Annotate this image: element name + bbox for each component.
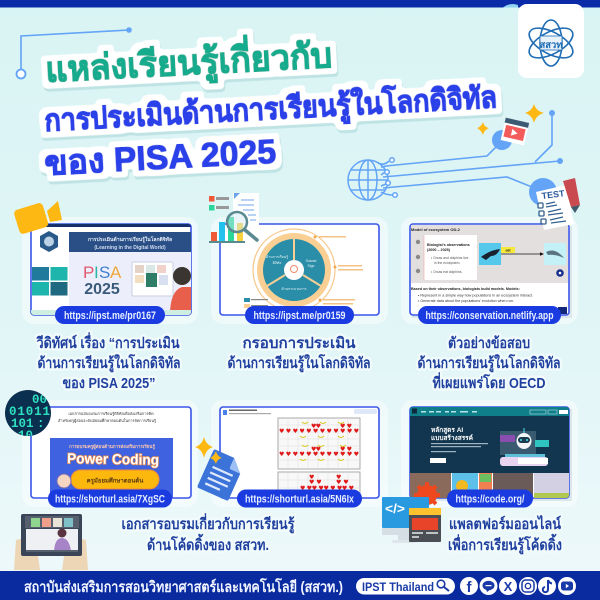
caption 6: เพื่อการเรียนรู้โค้ดดิ้ง	[448, 533, 562, 555]
Power Coding banner	[50, 438, 173, 498]
caption 2: กรอบการประเมิน	[242, 334, 356, 352]
heart grid 2: ♥ ♥♥ ♥♥ ♥ ♥♥ ♥	[300, 485, 354, 492]
icon: code monitor and window	[382, 482, 441, 543]
card 3: sample test: Model of ecosystem OD-2	[411, 227, 461, 232]
social icons	[460, 577, 576, 596]
observations panel: (2000 – 2025)	[427, 248, 451, 252]
explanation text	[411, 287, 533, 303]
url pill 5	[237, 490, 362, 508]
caption 1: ของ PISA 2025”	[62, 375, 156, 392]
icon: test sheet: TEST	[541, 188, 566, 201]
heart grid 2: ♥ ♥	[336, 479, 349, 486]
title line 1: แหล่งเรียนรู้เกี่ยวกับ	[44, 30, 333, 92]
caption 2: ด้านการเรียนรู้ในโลกดิจิทัล	[228, 353, 370, 373]
icon: facebook: f	[466, 579, 472, 596]
icon: binary code circle: :	[37, 417, 45, 431]
icon: x: X	[504, 579, 513, 594]
card 4: training document: ครูมัธยมศึกษาตอนต้น	[87, 476, 144, 486]
url pill 1	[55, 306, 165, 324]
top bar	[0, 0, 600, 8]
caption 1	[36, 332, 180, 392]
icon: binary code circle: 00	[32, 393, 47, 407]
caption 1: ด้านการเรียนรู้ในโลกดิจิทัล	[38, 353, 180, 373]
url pill 4: https://shorturl.asia/7XgSC	[55, 494, 165, 506]
caption 3: ด้านการเรียนรู้ในโลกดิจิทัล	[418, 353, 560, 373]
illustration: video call	[132, 262, 192, 315]
explanation text: Based on their observations, biologists build models. Models:	[411, 287, 520, 291]
robot illustration	[500, 428, 549, 466]
heart grid 1: ♥♥	[311, 446, 321, 453]
card 4: training document	[22, 400, 198, 508]
heart grid 1: ♥♥	[340, 423, 352, 430]
icon: video window	[501, 118, 529, 145]
url pill 6: https://code.org/	[456, 494, 524, 506]
PISA 2025 wordmark: P	[83, 263, 94, 282]
card 2: framework	[211, 217, 388, 324]
observations panel	[416, 235, 477, 280]
title	[43, 30, 498, 183]
icon: sparkle doc large	[195, 437, 213, 458]
icon: google doc	[197, 449, 245, 501]
card 4: training document: เอกสารฉบับอบรมการเรียนรู้ดิจิทัลเพื่อส่งเสริมการคิด	[68, 411, 154, 416]
search pill	[356, 578, 455, 594]
explanation text: • Generate data about the populations' evolution when run.	[418, 299, 514, 303]
heart grid 2	[278, 472, 360, 494]
card 4: training document: การอบรมครูผู้สอนด้านการส่งเสริมการเรียนรู้	[69, 443, 155, 450]
title line 3: ของ PISA 2025	[43, 133, 277, 183]
icon: sparkle doc small	[210, 451, 222, 464]
PISA 2025 wordmark: I	[94, 263, 99, 282]
icon: binary code circle: 10	[18, 429, 33, 443]
heart grid 1: ♥♥♥♥♥♥♥♥♥♥♥♥	[279, 428, 359, 435]
icon: chart with magnifier	[209, 193, 259, 243]
PISA 2025 wordmark: A	[110, 263, 122, 282]
footer strip	[31, 310, 191, 315]
url pill 3: https://conservation.netlify.app	[426, 310, 554, 322]
caption 1: วีดิทัศน์ เรื่อง “การประเมิน	[36, 332, 180, 352]
heart grid 2: ♥	[309, 474, 314, 481]
heart grid 2: ♥ ♥	[309, 479, 322, 486]
donut chart: ด้านกระบวนการ	[281, 287, 307, 291]
photo strip	[410, 473, 569, 498]
icon: binary code circle: 101	[11, 417, 34, 431]
video header	[69, 232, 191, 252]
observations panel: Biologist's observations	[427, 243, 470, 247]
icon: youtube	[558, 577, 576, 595]
decorative wire: title corner	[16, 27, 132, 78]
footer bar	[0, 571, 600, 600]
url pill 2	[245, 306, 354, 324]
observations panel: in the ecosystem.	[434, 261, 460, 265]
caption 4	[122, 513, 295, 554]
heart grid 1: ♥♥	[311, 423, 321, 430]
icon: test sheet	[536, 178, 580, 230]
icon grid	[32, 267, 68, 296]
icon: tiktok	[538, 577, 556, 595]
icon: IPST atom logo: สสวท	[540, 40, 562, 51]
icon: tablet video call	[14, 514, 88, 570]
caption 4: เอกสารอบรมเกี่ยวกับการเรียนรู้	[122, 513, 295, 534]
icon: hexagon logo	[40, 231, 58, 252]
PISA 2025 wordmark: 2025	[84, 281, 120, 298]
donut chart: Sign	[307, 264, 315, 268]
hero copy	[431, 443, 488, 452]
explanation text: • Represent in a simple way how populations in an ecosystem interact.	[418, 294, 533, 298]
card 1: video	[22, 217, 198, 324]
url pill 6	[447, 490, 533, 508]
orca to dolphin diagram: eat	[505, 248, 511, 252]
icon: line	[480, 577, 498, 595]
hero heading	[431, 426, 473, 440]
url pill 2: https://ipst.me/pr0159	[254, 310, 346, 322]
card 5: worksheet	[211, 400, 388, 508]
icon: code monitor and window: </>	[385, 501, 405, 516]
heart grid 1: ♥♥♥♥♥♥♥♥♥♥♥♥	[279, 451, 359, 458]
legend	[244, 298, 268, 308]
url pill 5: https://shorturl.asia/5N6Ix	[245, 494, 355, 506]
search pill: IPST Thailand	[362, 580, 434, 594]
donut chart: ดิจิทัล	[273, 261, 281, 265]
caption 2	[228, 334, 370, 373]
heart grid 2: ♥	[336, 474, 341, 481]
icon: sparkle large	[525, 104, 544, 123]
icon: binary code circle	[5, 390, 51, 436]
caption 4: ด้านโค้ดดิ้งของ สสวท.	[147, 533, 269, 554]
caption 3: ที่เผยแพร่โดย OECD	[432, 372, 546, 392]
card 6: code.org	[401, 400, 578, 508]
donut chart	[253, 229, 335, 311]
title line 2: การประเมินด้านการเรียนรู้ในโลกดิจิทัล	[43, 78, 498, 140]
hero heading: แบบสร้างสรรค์	[431, 433, 473, 442]
nav bar	[410, 407, 569, 416]
circuit wires	[378, 161, 389, 164]
card 4: training document: สำหรับครูผู้สอนระดับมัธยมศึกษาตอนต้นในการจัดการเรียนรู้	[58, 418, 156, 423]
icon: binary code circle: 01011	[9, 405, 50, 419]
url pill 4	[48, 490, 172, 508]
card 4: training document: Power Coding	[67, 451, 159, 469]
hero heading: หลักสูตร AI	[431, 426, 463, 435]
url pill 1: https://ipst.me/pr0167	[64, 310, 156, 322]
yellow level pill	[71, 470, 159, 489]
dark corner button	[558, 307, 567, 314]
icon: instagram	[519, 577, 537, 595]
chart annotations	[314, 236, 363, 304]
caption 3: ตัวอย่างข้อสอบ	[448, 335, 530, 352]
network globe illustration	[348, 110, 563, 206]
footer organisation name: สถาบันส่งเสริมการสอนวิทยาศาสตร์และเทคโนโลยี (สสวท.)	[24, 577, 343, 596]
PISA 2025 wordmark: S	[99, 263, 110, 282]
card 3: sample test	[401, 217, 578, 324]
hero	[410, 415, 569, 473]
heart grid 1: ♥♥	[340, 446, 352, 453]
caption 6	[448, 514, 562, 555]
logo card	[503, 4, 584, 78]
observations panel: • Orcas and dolphins live	[431, 256, 468, 260]
donut chart: ด้านการเรียนรู้	[266, 254, 288, 259]
observations panel: • Orcas eat dolphins.	[431, 270, 462, 274]
donut chart: Sowad	[306, 259, 316, 263]
PISA 2025 wordmark	[84, 266, 122, 294]
icon: sparkle small	[477, 122, 489, 135]
orca to dolphin diagram	[479, 243, 566, 277]
icon: video camera	[13, 201, 62, 235]
caption 6: แพลตฟอร์มออนไลน์	[449, 514, 562, 533]
heart grid 1	[278, 418, 360, 469]
icon: globe	[348, 160, 388, 200]
card 1: video: การประเมินด้านการเรียนรู้ในโลกดิจิทัล	[88, 236, 172, 244]
url pill 3	[418, 306, 561, 324]
caption 3	[418, 335, 560, 392]
spreadsheet header	[223, 409, 377, 415]
card 1: video: (Learning in the Digital World)	[94, 245, 166, 251]
